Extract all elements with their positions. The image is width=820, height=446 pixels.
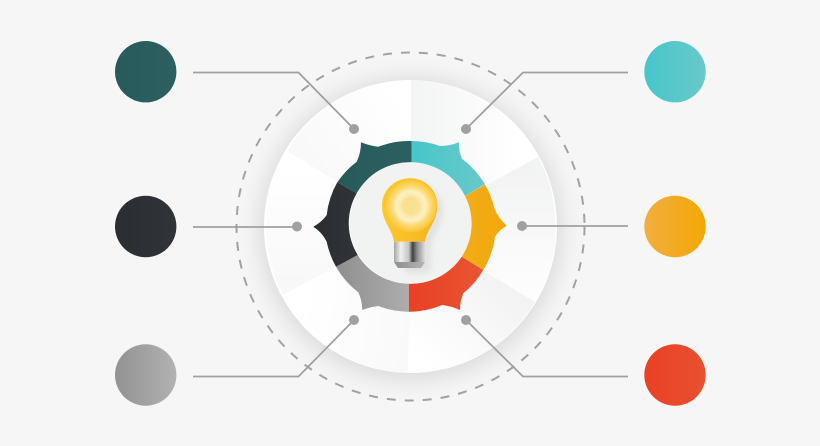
bulb base tip	[394, 262, 425, 268]
connector: bottom left	[193, 315, 359, 376]
connector: top left	[193, 72, 359, 134]
main disc with soft shadow and facets	[260, 78, 562, 380]
connector: bottom right	[461, 315, 628, 376]
connector: middle left	[193, 222, 302, 232]
bulb shadow	[405, 183, 443, 273]
connector: middle right	[517, 221, 628, 231]
gear segment: charcoal	[313, 182, 358, 267]
icon: light bulb	[382, 178, 443, 273]
gear segment: dark teal	[337, 141, 412, 193]
gear segment: cyan	[412, 141, 485, 196]
connector: top right	[461, 72, 628, 134]
bulb glow	[384, 180, 437, 232]
marker circle: charcoal	[115, 196, 176, 257]
marker circle: dark teal	[115, 41, 176, 102]
marker circle: orange	[644, 196, 706, 257]
dashed orbit ring	[236, 52, 584, 400]
bulb screw base	[394, 242, 425, 268]
gear ring	[313, 141, 507, 312]
marker circle: red	[644, 344, 706, 406]
marker circle: grey	[115, 344, 176, 406]
marker circle: cyan	[644, 41, 706, 102]
gear segment: grey	[336, 255, 409, 312]
gear segment: red	[409, 257, 483, 312]
hub circle	[350, 162, 471, 284]
gear segment: orange	[462, 185, 507, 270]
bulb glass	[382, 178, 437, 242]
